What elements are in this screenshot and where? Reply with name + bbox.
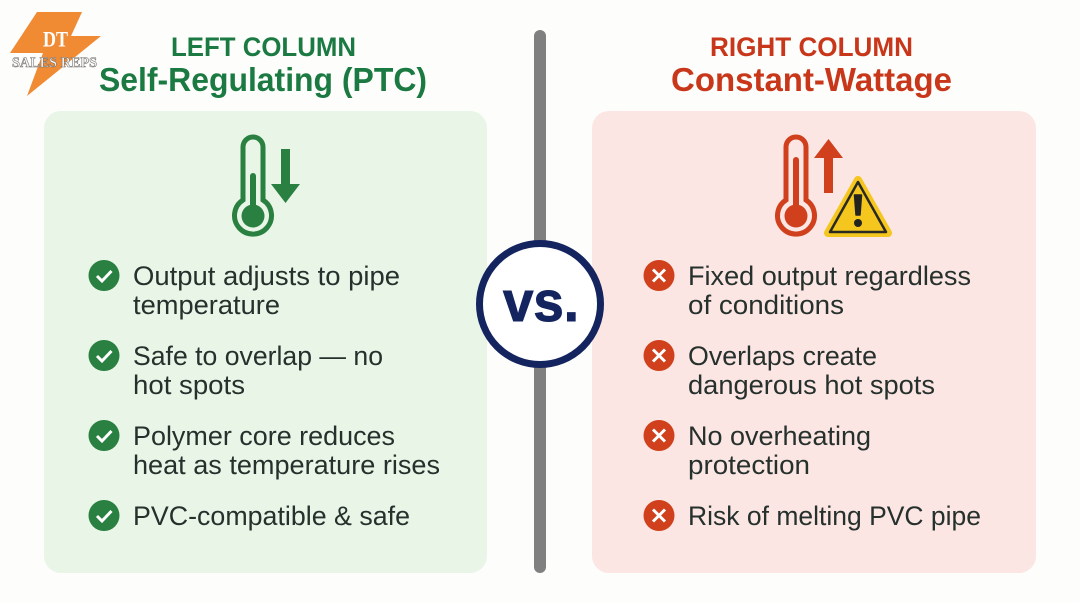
item: polymer core: [88, 420, 440, 480]
panel: self-regulating background: [44, 111, 487, 573]
item: overlaps: [644, 340, 935, 400]
item: no overheating protection: protection: [688, 450, 810, 480]
thermometer fill: [242, 173, 264, 228]
thermometer fill: [784, 157, 808, 228]
item: polymer core: Polymer core reduces: [133, 421, 395, 451]
label: right column: RIGHT COLUMN: [710, 32, 913, 62]
center divider: [534, 30, 546, 573]
badge: vs.: [480, 244, 600, 364]
item: no overheating protection: No overheating: [688, 421, 871, 451]
item: risk of melting: Risk of melting PVC pipe: [688, 501, 981, 531]
title: Constant-Wattage: Constant-Wattage: [671, 61, 952, 98]
icon: orange lightning bolt: [10, 12, 101, 96]
icon: warning triangle: [828, 180, 888, 233]
heading: right column: [671, 32, 952, 98]
item: safe to overlap: Safe to overlap — no: [133, 341, 383, 371]
heading: left column: [99, 32, 427, 98]
item: safe to overlap: [88, 340, 383, 400]
arrow: down: [271, 149, 300, 203]
icon: thermometer with down arrow: [234, 137, 300, 234]
item: output adjusts: [88, 260, 400, 320]
logo text: DT: DT: [43, 26, 68, 52]
badge: vs.: vs.: [503, 270, 579, 334]
logo text: Sales Reps: SALES REPS: [12, 55, 97, 71]
label: left column: LEFT COLUMN: [171, 32, 356, 62]
title: Self-Regulating (PTC): Self-Regulating (PTC): [99, 61, 427, 98]
item: output adjusts: Output adjusts to pipe: [133, 261, 400, 291]
icon: thermometer with up arrow and warning: [778, 137, 888, 234]
list: constant-wattage drawbacks: [644, 260, 981, 531]
list: self-regulating benefits: [88, 260, 440, 531]
item: safe to overlap: hot spots: [133, 370, 245, 400]
item: PVC compatible: PVC-compatible & safe: [133, 501, 410, 531]
item: overlaps: dangerous hot spots: [688, 370, 935, 400]
arrow: up: [814, 139, 843, 193]
item: fixed output: Fixed output regardless: [688, 261, 971, 291]
logo: DT Sales Reps: [10, 12, 101, 96]
item: no overheating protection: [644, 420, 871, 480]
item: fixed output: of conditions: [688, 290, 844, 320]
item: overlaps: Overlaps create: [688, 341, 877, 371]
item: fixed output: [644, 260, 971, 320]
thermometer outline: [234, 137, 272, 234]
item: output adjusts: temperature: [133, 290, 280, 320]
panel: constant-wattage background: [592, 111, 1036, 573]
item: polymer core: heat as temperature rises: [133, 450, 440, 480]
thermometer outline: [778, 137, 815, 234]
